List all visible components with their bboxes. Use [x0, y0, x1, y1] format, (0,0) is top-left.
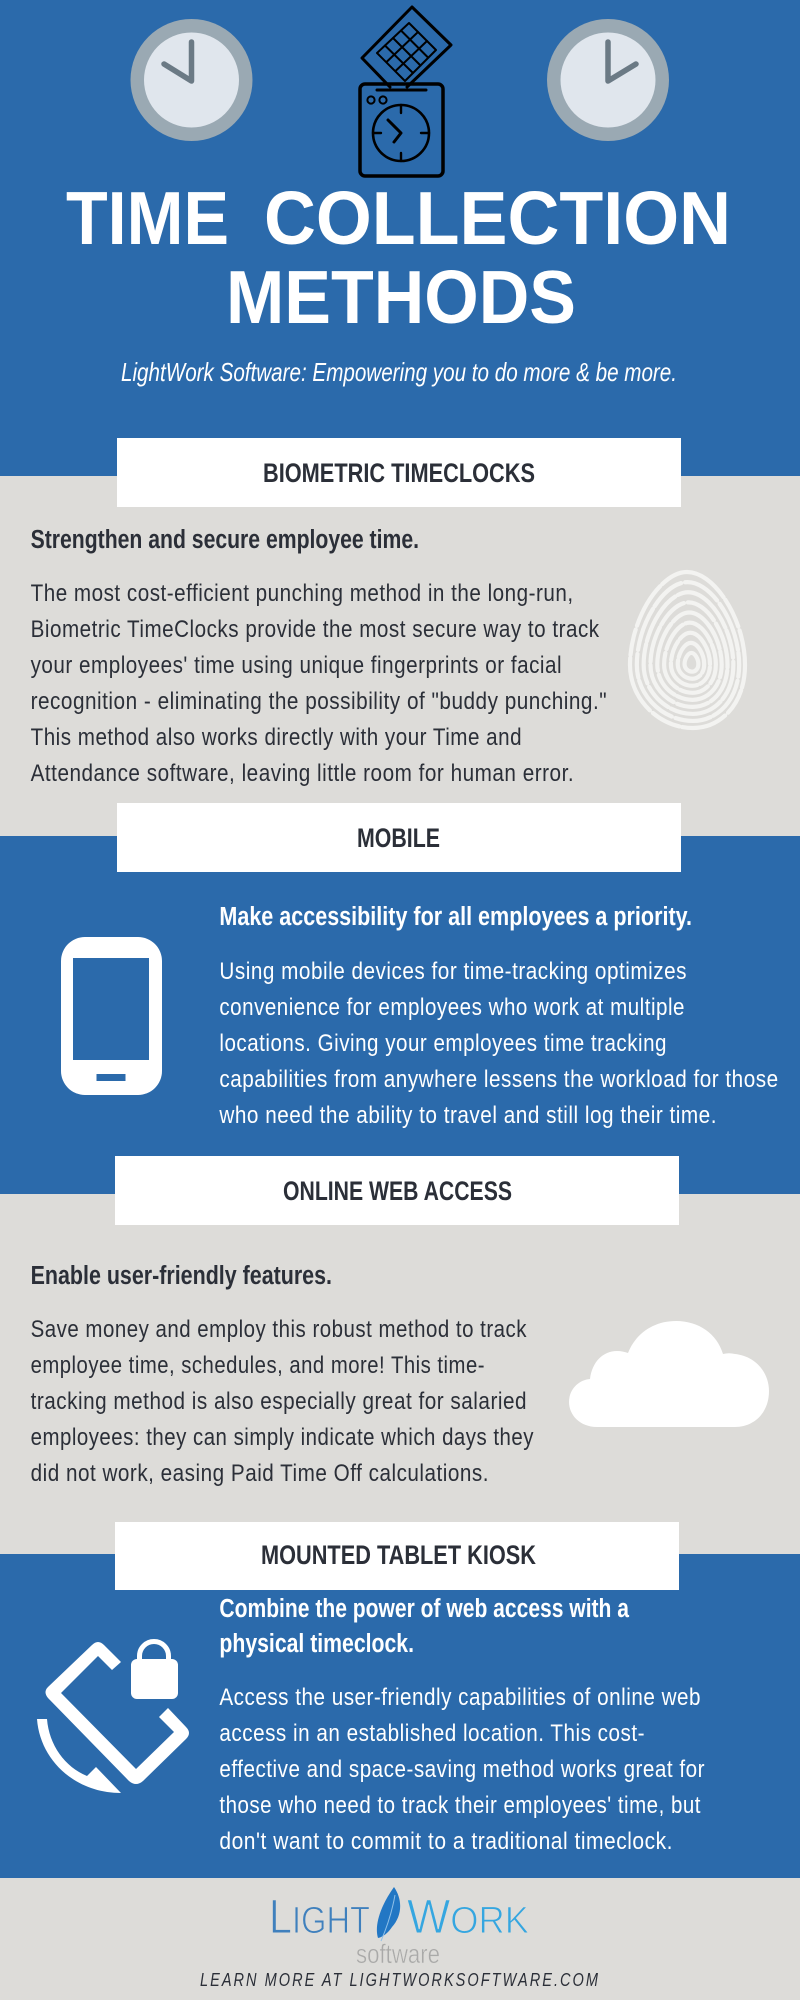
body text: don't want to commit to a traditional timeclock.	[219, 1828, 673, 1855]
body text: Biometric TimeClocks provide the most secure way to track	[31, 616, 600, 643]
learn more link: LEARN MORE AT LIGHTWORKSOFTWARE.COM	[200, 1970, 600, 1990]
body text: This method also works directly with your Time and	[31, 724, 522, 751]
heading box: mounted tablet kiosk: MOUNTED TABLET KIOSK	[261, 1540, 536, 1570]
body text: Using mobile devices for time-tracking optimizes	[219, 958, 687, 985]
icon: left clock	[130, 19, 252, 141]
heading box: mounted tablet kiosk	[115, 1522, 679, 1590]
body text: those who need to track their employees' time, but	[219, 1792, 701, 1819]
body text: did not work, easing Paid Time Off calculations.	[31, 1460, 489, 1487]
body text: effective and space-saving method works great for	[219, 1756, 705, 1783]
panel: mounted tablet kiosk	[0, 1522, 800, 1878]
icon: right clock	[547, 19, 669, 141]
body text	[31, 1316, 534, 1487]
subheading: Strengthen and secure employee time.	[31, 526, 419, 554]
subheading: Enable user-friendly features.	[31, 1262, 332, 1290]
subheading: Make accessibility for all employees a priority.	[219, 903, 692, 931]
title: TIME	[66, 176, 229, 260]
logo	[269, 1887, 529, 1969]
body text	[31, 580, 607, 787]
subheading	[219, 1595, 630, 1658]
heading box: online web access: ONLINE WEB ACCESS	[283, 1176, 512, 1206]
heading box: online web access	[115, 1156, 679, 1225]
heading box: mobile: MOBILE	[357, 823, 440, 853]
body text: The most cost-efficient punching method in the long-run,	[31, 580, 574, 607]
body text: recognition - eliminating the possibility of "buddy punching."	[31, 688, 607, 715]
body text: Save money and employ this robust method to track	[31, 1316, 527, 1343]
panel: header	[0, 0, 800, 476]
body text: convenience for employees who work at multiple	[219, 994, 685, 1021]
body text: Attendance software, leaving little room for human error.	[31, 760, 574, 787]
panel: biometric timeclocks	[0, 438, 800, 836]
heading box: biometric timeclocks: BIOMETRIC TIMECLOCKS	[263, 458, 535, 488]
icon: feather	[377, 1887, 400, 1941]
title: COLLECTION	[264, 176, 731, 260]
heading box: mobile	[117, 803, 681, 872]
logo: WORK	[407, 1891, 529, 1944]
icon: phone	[61, 937, 162, 1095]
title: METHODS	[226, 255, 576, 339]
icon: punch timeclock and card	[360, 7, 451, 176]
heading box: biometric timeclocks	[117, 438, 681, 507]
body text: Access the user-friendly capabilities of online web	[219, 1684, 701, 1711]
body text	[219, 1684, 705, 1855]
body text: employees: they can simply indicate which days they	[31, 1424, 534, 1451]
subheading: physical timeclock.	[219, 1630, 414, 1658]
subheading: Combine the power of web access with a	[219, 1595, 630, 1623]
body text: tracking method is also especially great for salaried	[31, 1388, 527, 1415]
icon: cloud	[569, 1321, 769, 1427]
body text: locations. Giving your employees time tracking	[219, 1030, 667, 1057]
body text: your employees' time using unique fingerprints or facial	[31, 652, 562, 679]
body text: access in an established location. This cost-	[219, 1720, 645, 1747]
title	[66, 176, 731, 339]
icon: fingerprint	[630, 572, 745, 728]
panel: online web access	[0, 1156, 800, 1554]
panel: footer	[0, 1878, 800, 2000]
logo: software	[356, 1939, 440, 1969]
body text	[219, 958, 779, 1129]
icon: rotating tablet with lock	[37, 1642, 189, 1793]
body text: who need the ability to travel and still log their time.	[219, 1102, 717, 1129]
logo: LIGHT	[269, 1891, 370, 1944]
panel: mobile	[0, 803, 800, 1194]
body text: employee time, schedules, and more! This time-	[31, 1352, 485, 1379]
